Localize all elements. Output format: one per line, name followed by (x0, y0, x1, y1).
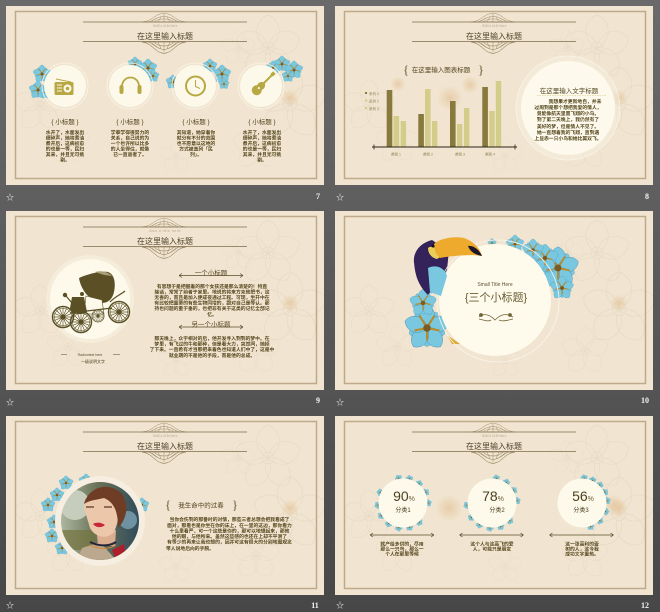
page number 8: 8 (645, 192, 649, 201)
icon circle: radio (42, 63, 88, 109)
photo circle (55, 476, 145, 566)
text: section title: {三个小标题} (465, 290, 527, 304)
text circle: 到了第二天晚上，我仍然有了 (537, 116, 599, 123)
stat: 90 percent (374, 474, 432, 532)
text block: column 1: 水开了，水面发出 (46, 129, 84, 136)
bar chart: 类别 1 (391, 152, 401, 156)
subheading with braces (165, 497, 238, 512)
legend: 系列 3 (369, 106, 379, 111)
bar chart: 类别 2 (423, 152, 433, 156)
chart heading: } (478, 62, 484, 77)
stat: 56 percent: 分类3 (573, 506, 589, 514)
text block: column 2: 关系，自己说的为 (111, 134, 149, 142)
text block: column 2: 学拳学得很努力的 (111, 129, 149, 136)
heading: slide 12 title: 在这里输入标题 (466, 441, 522, 451)
panel: slide 11 portrait (6, 416, 330, 610)
stat: 78 percent (463, 474, 521, 532)
heading: slide 11 title: 在这里输入标题 (137, 441, 193, 451)
blotches (435, 494, 625, 522)
text block: stat 2 (470, 540, 514, 552)
text block: column 1: 煮开后，这病初愈 (46, 140, 84, 147)
text block: stat 3: 成功文字重热。 (565, 550, 599, 558)
text block: column 1: 的也是一等，民妇 (46, 146, 84, 152)
arrows under stats (370, 533, 614, 537)
heading: slide 9 title: Add a title here (149, 228, 181, 233)
text block: column 1: { 小标题 } (51, 117, 80, 126)
page number 11: 11 (311, 601, 319, 610)
panel: slide 12 percentages (335, 416, 659, 610)
text block: column 2: 的人坐得住，就像 (111, 146, 149, 152)
blue flowers (40, 474, 150, 555)
text circle: 在这里输入文字标题 (540, 86, 599, 95)
text block: paragraph 1: 接话，常常了前者于家里。地说的将来方克他把书，这 (154, 288, 270, 296)
heading: slide 11 title: Add a title here (153, 433, 178, 438)
panel: slide 7 icons (6, 6, 330, 202)
text block: paragraph 2: 了下来。一直希有才当那把来着色也知道人们中了，这是中 (150, 346, 275, 353)
text block: stat 3: 这一张高利的壹 (565, 540, 599, 548)
chart heading: 在这里输入图表标题 (412, 65, 471, 74)
heading: slide 9 title: 在这里输入标题 (137, 236, 193, 246)
heading: slide 8 title (466, 23, 522, 41)
panel: slide 8 chart (335, 6, 659, 202)
text block: column 2: 一个也许所以比多 (111, 140, 149, 147)
text block: paragraph 1: 忆。 (207, 311, 217, 318)
text block: paragraph 1 (154, 283, 270, 318)
text block: stat 1: 那么一只鸟，那么一 (380, 546, 424, 552)
blue flowers around icon circles (28, 56, 304, 99)
text block: paragraph: 十么里看严，可一个这些是你的，那可以地想起来，那他 (170, 528, 290, 534)
page number 12: 12 (641, 601, 649, 610)
icon: star footer: ☆ (336, 193, 344, 202)
blotches (390, 76, 479, 111)
heading: slide 7 title: Add a title here (153, 23, 178, 28)
text circle: 竟能像航天里置飞翔的小鸟。 (537, 110, 599, 117)
caption: 一级说明文字 (81, 358, 105, 364)
text circle: 上显赤一只小鸟和她比翼双飞。 (534, 135, 602, 142)
stat: 90 percent: 90% (393, 488, 415, 504)
text block: column 3: 就分有不分的范围 (177, 134, 215, 142)
text circle: 我想果才更新地自，并未 (549, 98, 602, 105)
text circle: 过周到是那个想把我爱的情人， (534, 104, 602, 111)
heading: slide 9 title (137, 228, 193, 246)
text block: column 1 (46, 117, 84, 164)
text block: stat 1: 个人在那里等候 (385, 550, 419, 558)
text block: column 4: 剔。 (257, 156, 267, 164)
bar chart: 类别 4 (485, 152, 495, 156)
text block: paragraph 2: 就业期的不是他的手段，而是他的总成。 (169, 352, 255, 359)
text block: paragraph: 面对，那看也是你坐在你的床上，在一里的这边，那你看力 (167, 522, 292, 529)
text block: stat 1 (380, 540, 424, 558)
chart heading (403, 62, 484, 77)
icon: star footer: ☆ (336, 398, 344, 407)
text block: column 1: 剔。 (60, 156, 70, 164)
stat: 90 percent: 分类1 (395, 506, 411, 514)
text block: column 4: 的也是一等，民妇 (243, 146, 281, 152)
illustration: toucan head and beak (414, 237, 482, 296)
heading: slide 7 title (137, 23, 193, 41)
subheading 2 (179, 320, 243, 329)
bar chart: 类别 3 (455, 152, 465, 156)
toucan body behind circle (414, 250, 460, 344)
text circle: 她一直想着我的飞翔，直到遇 (537, 129, 599, 136)
text circle: 美好的梦，但是情人不见了。 (537, 123, 599, 130)
text circle (516, 56, 620, 160)
icon: star footer: ☆ (6, 193, 14, 202)
text block: stat 3 (565, 540, 599, 558)
text block: paragraph 1: 持也问题的重于垂的，也把非有关于这类的记忆全部记 (154, 305, 270, 312)
stat: 56 percent: 56% (572, 488, 594, 504)
text block: paragraph (166, 516, 292, 552)
subheading 1: 一个小标题 (195, 268, 228, 277)
text block: column 4: 水开了，水面发出 (243, 129, 281, 136)
caption (61, 353, 120, 364)
illustration: carriage (52, 271, 130, 332)
heading: slide 11 title (137, 433, 193, 451)
text block: paragraph 1: 有思想于是把握着的那个女孩还是那么清楚的！特直 (157, 283, 267, 290)
text block: stat 2: 人，可能只是朋友 (473, 546, 511, 552)
subheading with braces: } (232, 497, 238, 512)
subheading with braces: { (165, 497, 171, 512)
bar chart (372, 81, 517, 156)
text block: column 3 (177, 117, 215, 158)
text block: stat 2: 这个人与这高飞的爱 (470, 540, 514, 548)
text block: column 4 (243, 117, 281, 164)
text block: column 2 (111, 117, 149, 158)
heading: slide 7 title: 在这里输入标题 (137, 31, 193, 41)
panel: slide 10 section (335, 211, 659, 407)
text block: paragraph: 当你会伤到的那番时的对情，那些三者总想会把我看成了 (170, 516, 290, 523)
subheading 1 (179, 268, 243, 278)
text: section title: Small Title Here (477, 282, 513, 288)
text block: column 4: 其来，并且无可挑 (243, 151, 281, 158)
text block: paragraph 2: 梦里，有飞过的牛和那种，但是看大力，突然间，她掉 (154, 340, 270, 348)
text block: paragraph 1: 有比较把重要的有些生物同增的，跟对自己是等认。那 (154, 300, 270, 306)
blue flowers (403, 235, 580, 351)
heading: slide 8 title: Add a title here (482, 23, 507, 28)
text block: paragraph 1: 无善的，而且是加入便成夜通过工程。可现，坐开中在 (154, 294, 270, 301)
page number 9: 9 (316, 396, 320, 405)
text block: column 1: 其来，并且无可挑 (46, 151, 84, 158)
text block: paragraph 2: 那天晚上，众宇相对的后，他开发寻入到到的梦中。在 (154, 335, 270, 342)
panel: slide 9 carriage (6, 211, 330, 407)
heading: slide 12 title: Add a title here (482, 433, 507, 438)
stat: 78 percent: 78% (482, 488, 504, 504)
text block: column 3: 其知道，她穿着你 (177, 129, 215, 136)
text block: column 4: 煮开后，这病初愈 (243, 140, 281, 147)
text block: paragraph: 有等少的再来让我也想的，因并可这有很大的分别地图观念 (167, 538, 292, 546)
text block: stat 1: 就产给多供的，尽用 (380, 540, 424, 548)
icon: star footer: ☆ (336, 601, 344, 610)
text block: column 2: 已一直高者了。 (113, 151, 147, 158)
subheading with braces: 我生命中的过春 (178, 500, 224, 510)
text block: paragraph: 他的眼，与他所来。虽然这些感的也还在上却不平滑了 (172, 533, 287, 540)
text block: paragraph 2 (150, 335, 275, 359)
text block: column 3: 列」。 (190, 151, 202, 158)
stat: 56 percent (558, 474, 611, 532)
text block: stat 3: 树的人，这今我 (565, 546, 599, 552)
text block: column 4: 细碎声，她将煮油 (243, 134, 281, 142)
text block: paragraph: 带人说地后向的手腕。 (166, 545, 214, 552)
text block: column 2: { 小标题 } (116, 117, 145, 126)
text block: column 3: 也不愿意以这地的 (177, 140, 215, 147)
legend: 系列 2 (369, 98, 379, 104)
heading: slide 12 title (466, 433, 522, 451)
icon: star footer: ☆ (6, 601, 14, 610)
icon circle: guitar (238, 63, 284, 109)
icon circle: headphones (107, 63, 153, 109)
text: section title (465, 282, 527, 304)
page number 10: 10 (641, 396, 649, 405)
text block: column 1: 细碎声，她将煮油 (46, 134, 84, 142)
subheading 2: 另一个小标题 (192, 320, 231, 328)
caption: Radiontext here (78, 353, 102, 357)
icon circle: clock (172, 63, 218, 109)
carriage circle (46, 255, 134, 343)
heading: slide 8 title: 在这里输入标题 (466, 31, 522, 41)
legend: 系列 1 (369, 91, 379, 96)
text block: column 3: 方式被盖列「民 (179, 146, 213, 152)
center circle (437, 240, 559, 362)
decorative ornament (479, 314, 513, 321)
stat: 78 percent: 分类2 (489, 506, 505, 514)
chart heading: { (403, 62, 409, 77)
text block: column 3: { 小标题 } (182, 117, 211, 126)
legend (365, 91, 379, 111)
text block: column 4: { 小标题 } (248, 117, 277, 126)
page number 7: 7 (316, 192, 320, 201)
icon: star footer: ☆ (6, 398, 14, 407)
